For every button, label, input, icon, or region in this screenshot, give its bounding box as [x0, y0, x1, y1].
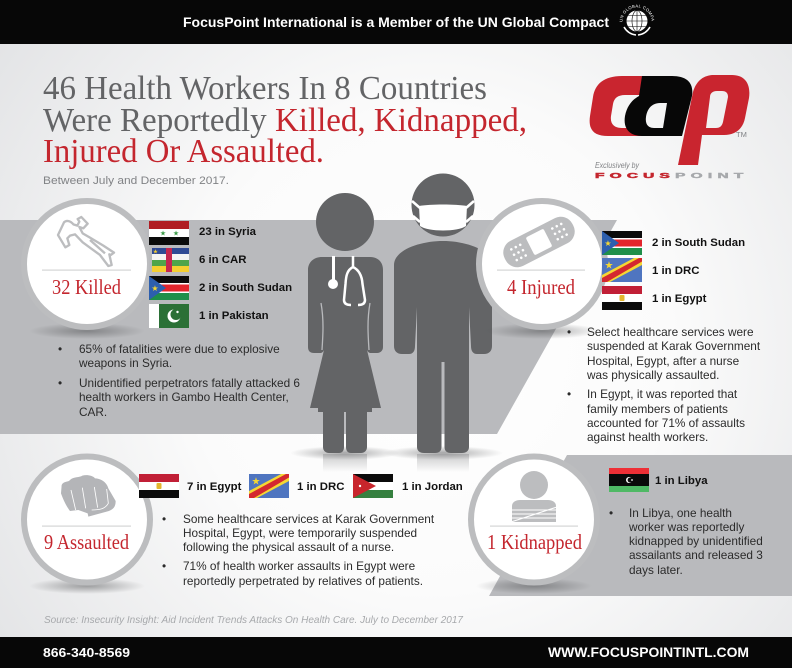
flags list: killed: 1 in Pakistan [199, 310, 269, 322]
figure shadow [290, 446, 400, 460]
text block: injured bullets: suspended at Karak Government [587, 339, 761, 353]
body [394, 241, 492, 453]
text block: assaulted bullets: reportedly perpetrated by relatives of patients. [183, 574, 423, 588]
text block: killed bullets: 65% of fatalities were due to explosive [79, 342, 280, 356]
phone number: 866-340-8569 [43, 645, 130, 660]
text block: assaulted bullets: following the physical assault of a nurse. [183, 540, 394, 554]
text block: killed bullets: CAR. [79, 405, 107, 419]
source note: Source: Insecurity Insight: Aid Incident Trends Attacks On Health Care. July to December 2017 [44, 614, 464, 626]
circle shadow [29, 323, 145, 339]
text block: injured bullets: In Egypt, it was reported that [587, 387, 738, 401]
stat label: 32 Killed [52, 275, 121, 299]
flags list: injured: 1 in DRC [652, 265, 699, 277]
stat label: 1 Kidnapped [487, 530, 582, 554]
circle shadow [29, 578, 145, 594]
flags list: injured: 2 in South Sudan [652, 237, 745, 249]
flag: kidnapped [609, 468, 708, 492]
divider [497, 270, 585, 271]
surgical mask [412, 201, 474, 230]
flag: kidnapped: 1 in Libya [655, 475, 708, 487]
text block: assaulted bullets [162, 512, 435, 588]
flags list: killed: 23 in Syria [199, 226, 257, 238]
text block: kidnapped bullets: worker was reportedly [628, 520, 744, 534]
panel: 9 Assaulted [24, 456, 150, 594]
text block: injured bullets: • [567, 387, 571, 401]
text block: injured bullets: accounted for 71% of assaults [587, 416, 745, 430]
FocusPoint wordmark: POINT [675, 172, 744, 180]
figure: male health worker with mask [383, 174, 503, 472]
text block: killed bullets: health workers in Gambo Health Center, [79, 390, 289, 404]
arm gaps [321, 303, 370, 350]
logo letter p [678, 75, 749, 165]
circle shadow [484, 323, 600, 339]
flags list: killed: 2 in South Sudan [199, 282, 292, 294]
divider [42, 270, 131, 271]
exclusively by: Exclusively by [595, 161, 640, 170]
icon: UN Global Compact logo [620, 4, 654, 36]
body with dress [308, 257, 383, 453]
flags list: killed: 6 in CAR [199, 254, 246, 266]
flags list: injured [602, 231, 745, 310]
divider [42, 526, 131, 527]
circle shadow [476, 578, 592, 594]
title: 46 Health Workers In 8 Countries [43, 70, 487, 107]
icon: stethoscope [328, 256, 365, 305]
leg reflection [323, 454, 367, 472]
text block: injured bullets: against health workers. [587, 430, 708, 444]
text block: kidnapped bullets: In Libya, one health [629, 506, 732, 520]
banner text: FocusPoint International is a Member of the UN Global Compact [183, 14, 609, 30]
text block: assaulted bullets: • [162, 512, 166, 526]
trademark: TM [736, 130, 747, 139]
text block: kidnapped bullets [609, 506, 763, 577]
figure: female health worker [290, 193, 400, 472]
leg reflection [417, 454, 469, 472]
website: WWW.FOCUSPOINTINTL.COM [548, 645, 749, 660]
circle badge [479, 201, 605, 327]
stat label: 4 Injured [507, 275, 575, 299]
panel: gray band for killed and injured [0, 220, 617, 434]
text block: injured bullets: Select healthcare services were [587, 325, 754, 339]
text block: injured bullets: family members of patients [587, 402, 728, 416]
text block: kidnapped bullets: • [609, 506, 613, 520]
head [412, 174, 474, 236]
icon: bandage [499, 212, 579, 272]
flags row: assaulted: 7 in Egypt [187, 481, 242, 493]
text block: kidnapped bullets: assailants and released 3 [629, 548, 763, 562]
text block: injured bullets [567, 325, 761, 444]
text block: kidnapped bullets: days later. [629, 563, 683, 577]
icon: fist [61, 475, 116, 517]
text block: killed bullets: • [58, 376, 62, 390]
circle badge [24, 456, 150, 582]
panel: 4 Injured [479, 201, 605, 339]
panel: 1 Kidnapped [471, 456, 597, 594]
title: Injured Or Assaulted. [43, 133, 324, 170]
circle badge [24, 201, 150, 327]
text block: assaulted bullets: • [162, 559, 166, 573]
logo letter c [590, 76, 644, 136]
circle badge [471, 456, 597, 582]
subtitle: date range: Between July and December 2017. [43, 175, 229, 187]
flags row: assaulted: 1 in DRC [297, 481, 344, 493]
text block: injured bullets: Hospital, Egypt, after a nurse [587, 354, 740, 368]
logo letter a [625, 76, 692, 136]
text block: assaulted bullets: Some healthcare services at Karak Government [183, 512, 435, 526]
icon: chalk body outline [58, 217, 114, 266]
title: Were Reportedly Killed, Kidnapped, [43, 102, 527, 139]
flags list: killed [149, 221, 292, 328]
flags row: assaulted [139, 474, 463, 498]
figure shadow [383, 446, 503, 460]
top banner [0, 0, 792, 44]
stat label: 9 Assaulted [44, 530, 129, 554]
bottom banner [0, 637, 792, 668]
text block: injured bullets: • [567, 325, 571, 339]
text block: injured bullets: was physically assaulted. [586, 368, 719, 382]
flags list: injured: 1 in Egypt [652, 293, 707, 305]
text block: killed bullets [58, 342, 300, 419]
icon: tied person [511, 471, 557, 522]
logo: CAP exclusively by FocusPoint [590, 75, 749, 180]
panel: gray band for kidnapped [489, 455, 792, 596]
panel: 32 Killed [24, 201, 150, 339]
text block: killed bullets: • [58, 342, 62, 356]
text block: kidnapped bullets: kidnapped by unidentified [629, 534, 763, 548]
text block: assaulted bullets: 71% of health worker assaults in Egypt were [183, 559, 416, 573]
title [43, 70, 527, 170]
head [316, 193, 374, 251]
divider [490, 526, 578, 527]
text block: killed bullets: weapons in Syria. [78, 356, 172, 370]
text block: killed bullets: Unidentified perpetrators fatally attacked 6 [79, 376, 300, 390]
text block: assaulted bullets: Hospital, Egypt, were temporarily suspended [183, 526, 417, 540]
flags row: assaulted: 1 in Jordan [402, 481, 463, 493]
FocusPoint wordmark: FOCUS [595, 172, 670, 180]
FocusPoint wordmark [595, 172, 744, 180]
